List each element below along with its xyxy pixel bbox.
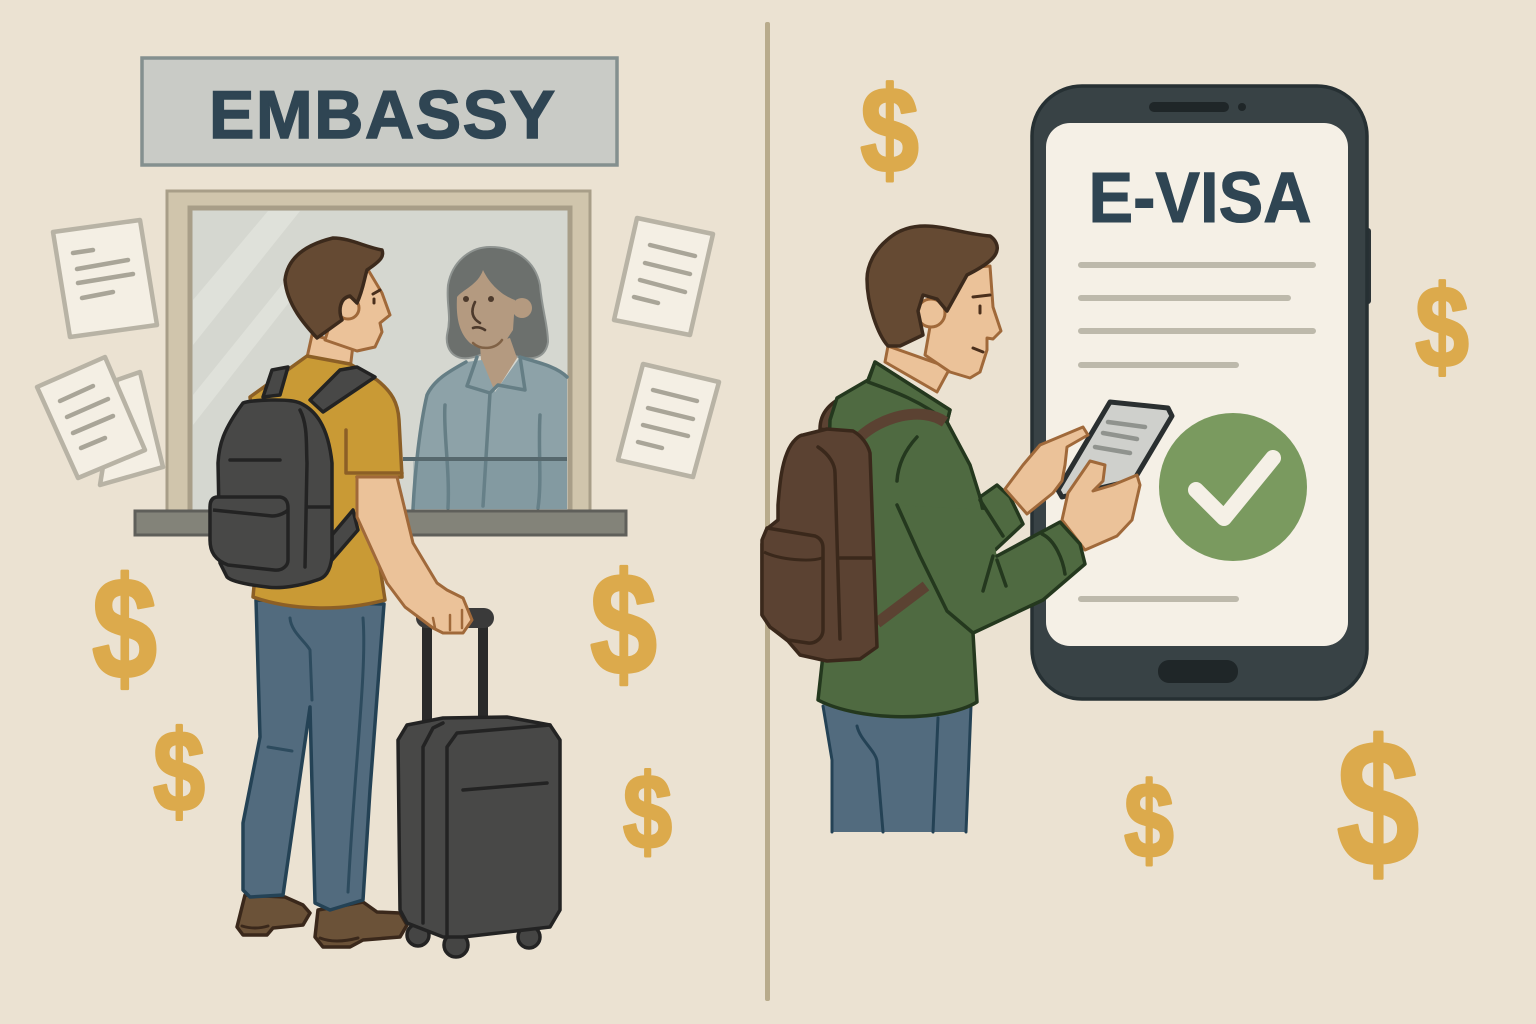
ear <box>917 299 945 327</box>
suitcase <box>398 618 560 957</box>
jeans <box>823 700 971 832</box>
neck <box>885 346 950 392</box>
embassy sign <box>142 58 617 165</box>
jacket collar <box>868 362 950 422</box>
arm and hand on handle <box>357 477 472 633</box>
smartphone <box>1032 86 1371 699</box>
panel: embassy <box>37 58 719 957</box>
jeans <box>243 600 384 910</box>
divider between panels <box>765 22 770 1001</box>
approved check badge <box>1159 413 1307 561</box>
head <box>925 266 1001 378</box>
e-visa title: E-VISA <box>1088 159 1312 238</box>
front sleeve <box>897 505 1085 633</box>
face details <box>373 290 380 303</box>
holding hand <box>1062 461 1140 550</box>
dollar signs: e-visa costs: $ <box>1337 703 1419 903</box>
dollar signs: embassy costs: $ <box>92 547 157 709</box>
shirt <box>250 356 402 608</box>
backpack <box>762 429 877 661</box>
hair <box>867 226 997 346</box>
dollar signs: embassy costs: $ <box>153 708 205 836</box>
dollar signs: e-visa costs <box>860 63 1469 903</box>
ear <box>337 297 359 319</box>
head <box>325 268 390 351</box>
dollar signs: e-visa costs: $ <box>860 63 919 199</box>
neck <box>306 335 353 370</box>
documents on the left <box>37 220 163 485</box>
panel: e-visa <box>762 63 1469 903</box>
traveller with backpack and suitcase <box>210 238 560 957</box>
backpack straps <box>263 367 375 560</box>
backpack back panel <box>820 394 880 440</box>
form lines <box>1081 265 1313 599</box>
dollar signs: e-visa costs: $ <box>1415 263 1469 392</box>
boots <box>237 895 407 947</box>
documents on the right <box>614 218 719 477</box>
dollar signs: embassy costs: $ <box>623 752 672 871</box>
handheld phone <box>1058 402 1172 497</box>
dollar signs: embassy costs: $ <box>590 543 657 706</box>
pointing hand <box>1005 427 1088 514</box>
backpack <box>218 400 332 588</box>
embassy sign: EMBASSY <box>209 77 555 153</box>
dollar signs: e-visa costs: $ <box>1124 760 1174 880</box>
dollar signs: embassy costs <box>92 543 672 871</box>
embassy service window <box>167 191 590 513</box>
clerk behind glass <box>403 247 567 510</box>
back sleeve <box>980 485 1023 552</box>
face details <box>973 295 990 352</box>
applicant using phone <box>762 226 1172 832</box>
jacket body <box>818 362 993 717</box>
hair <box>285 238 383 338</box>
jacket seams <box>897 437 1085 633</box>
counter <box>135 511 626 535</box>
backpack straps <box>860 414 945 623</box>
